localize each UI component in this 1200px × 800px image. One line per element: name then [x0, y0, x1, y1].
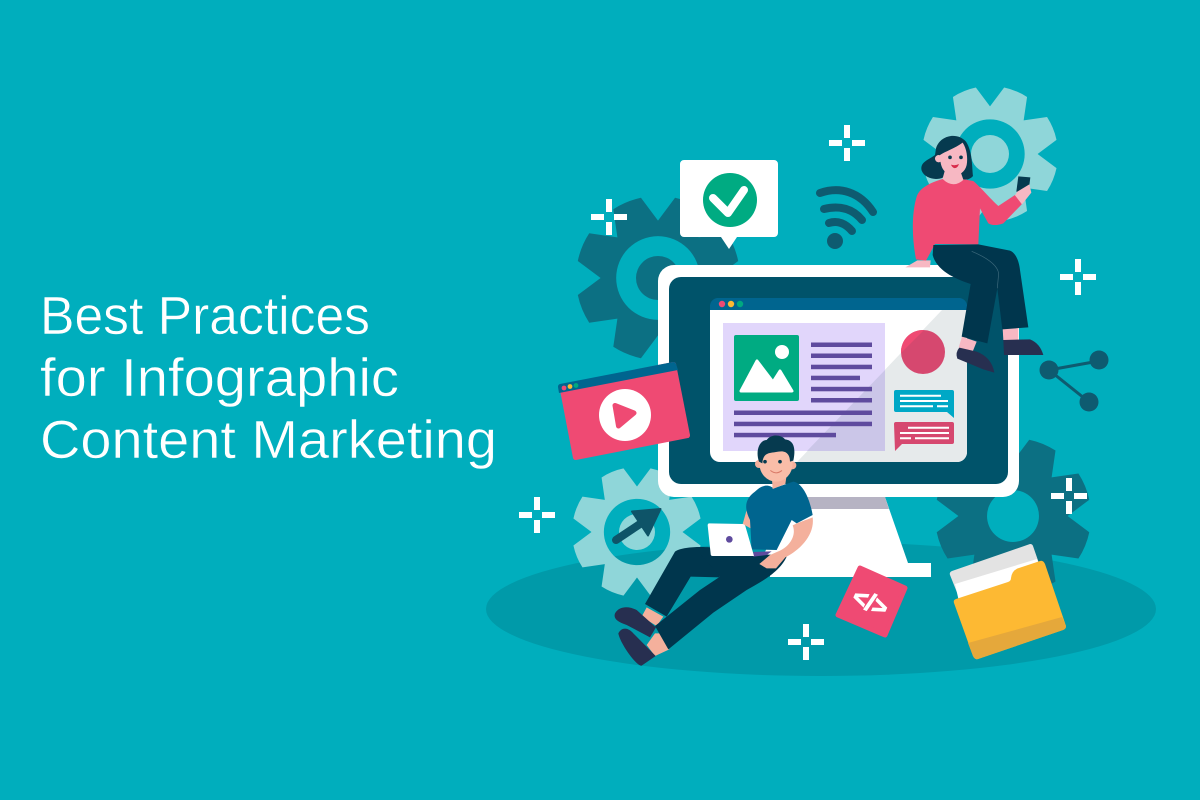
icon: network nodes	[1040, 350, 1108, 412]
folder inner paper	[955, 559, 1045, 606]
pink circle	[901, 330, 945, 374]
monitor	[658, 265, 1019, 577]
sparkle: left	[519, 497, 555, 533]
hand holding phone	[1015, 184, 1031, 204]
front ankle lower	[647, 633, 669, 656]
content panel	[723, 323, 885, 451]
lower shoe	[618, 629, 656, 666]
title: Best Practices	[40, 286, 370, 346]
play button	[599, 389, 651, 441]
left ankle	[959, 337, 977, 352]
icon: wifi	[820, 190, 873, 245]
text lines	[734, 342, 872, 437]
upper shoe	[615, 607, 656, 637]
sparkle: top left	[591, 199, 627, 235]
pants crease	[972, 251, 999, 288]
browser window	[710, 298, 967, 462]
check mark speech bubble	[680, 160, 778, 249]
folder	[950, 544, 1066, 659]
chat bubble: pink	[894, 422, 954, 451]
monitor frame	[658, 265, 1019, 497]
code tag tile	[838, 568, 905, 635]
ground ellipse	[486, 542, 1156, 676]
window header	[710, 298, 967, 310]
shirt	[746, 482, 813, 550]
right shoe	[1003, 339, 1043, 355]
hair back	[921, 136, 973, 180]
sparkle: top center	[829, 125, 865, 161]
folder body	[954, 561, 1066, 659]
main leg	[655, 553, 787, 649]
video player card	[558, 362, 690, 460]
pants	[933, 244, 1028, 343]
gear: bottom right dark	[937, 440, 1089, 592]
hand on monitor	[905, 260, 931, 267]
man with laptop	[615, 436, 813, 666]
title	[40, 286, 497, 470]
image placeholder	[734, 335, 799, 401]
chat bubble: blue	[894, 390, 954, 418]
window shaded corner	[797, 310, 967, 462]
left arm and hand	[759, 517, 813, 568]
neck	[772, 475, 787, 489]
title: for Infographic	[40, 348, 399, 408]
face	[935, 143, 967, 176]
right arm behind	[743, 510, 753, 528]
phone	[1016, 176, 1030, 193]
sweater	[913, 179, 1022, 261]
monitor stand	[760, 497, 931, 577]
gear: top left dark	[578, 198, 738, 358]
folder bottom band	[968, 617, 1066, 659]
neck	[942, 170, 964, 187]
back leg	[645, 547, 720, 617]
sparkle: bottom	[788, 624, 824, 660]
sparkle: on lower gear	[1051, 478, 1087, 514]
window dots	[719, 301, 743, 307]
head	[755, 436, 796, 482]
laptop	[708, 523, 772, 557]
code tag tile: </>	[848, 583, 892, 623]
title: Content Marketing	[40, 410, 497, 470]
left shoe	[957, 348, 994, 373]
folder back paper	[950, 544, 1042, 600]
sparkle: right	[1060, 259, 1096, 295]
woman with phone	[905, 136, 1043, 373]
gear: top right light	[923, 87, 1057, 221]
right ankle	[1003, 328, 1018, 340]
icon: arrow	[616, 509, 660, 540]
front ankle upper	[642, 607, 663, 626]
monitor screen	[669, 277, 1008, 484]
gear: bottom left light with arrow	[573, 468, 701, 596]
